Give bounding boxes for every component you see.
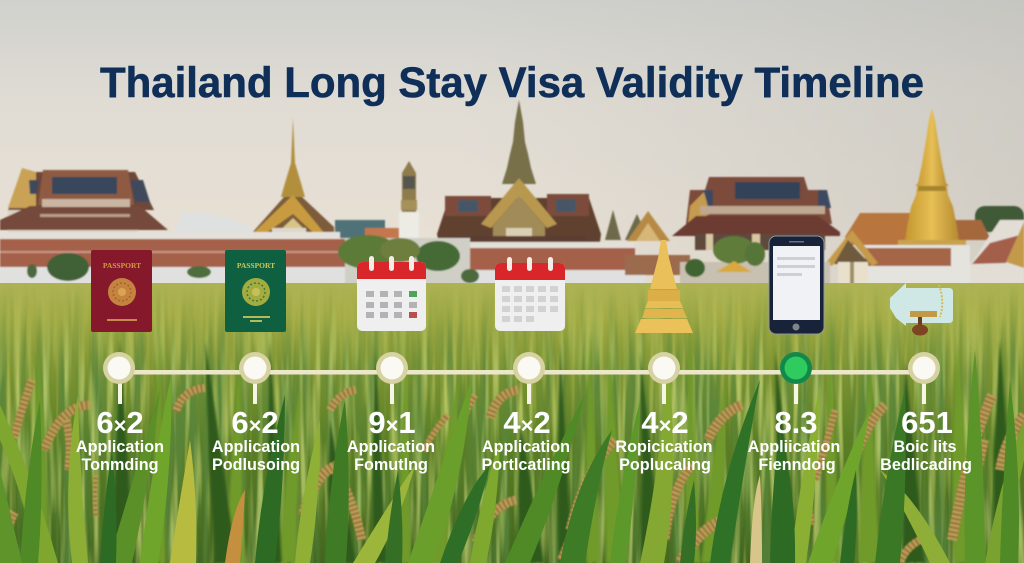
timeline connector line xyxy=(119,370,924,374)
icon: green passport xyxy=(225,250,286,332)
icon: green passport: PASSPORT xyxy=(237,261,275,270)
right side pavilions xyxy=(826,220,1024,285)
far trees and low buildings xyxy=(172,206,1024,240)
timeline step 6: active green node xyxy=(748,352,840,474)
icon: calendar xyxy=(495,257,565,331)
background: temple skyline xyxy=(0,100,1024,285)
small gold temple centre right xyxy=(627,211,670,241)
orange roofs behind stupa xyxy=(845,213,910,255)
background: rice field xyxy=(0,283,1024,563)
timeline step 4: Portlcatling xyxy=(481,456,571,474)
timeline step 6: active green node: 8.3 xyxy=(774,405,818,440)
timeline step 5: 4×2 xyxy=(641,405,689,440)
background: rice blurred blades xyxy=(30,320,1016,563)
timeline step 5: Poplucaling xyxy=(619,456,711,474)
icon: golden stupa xyxy=(635,240,693,333)
foreground rice blades xyxy=(0,350,1024,563)
golden stupa xyxy=(898,108,966,247)
timeline step 4: Application xyxy=(482,438,570,456)
background: sky xyxy=(0,0,1024,290)
timeline step 2: 6×2 xyxy=(231,405,279,440)
timeline step 2: Podlusoing xyxy=(212,456,300,474)
icon: red passport xyxy=(91,250,152,332)
timeline step 3: Application xyxy=(347,438,435,456)
timeline step 7: 651 xyxy=(901,405,953,440)
icon: red passport: PASSPORT xyxy=(103,261,141,270)
timeline step 5: Ropicication xyxy=(615,438,713,456)
timeline step 2: Application xyxy=(212,438,300,456)
icon: calendar with coloured days xyxy=(357,256,426,331)
title: Thailand Long Stay Visa Validity Timeline xyxy=(100,59,924,107)
rice panicles xyxy=(4,380,1024,563)
icon: smartphone xyxy=(769,236,824,334)
icon: pale teal arrow and brown base xyxy=(890,283,953,336)
timeline step 4: 4×2 xyxy=(503,405,551,440)
small gold temple xyxy=(250,118,334,242)
white bell tower xyxy=(399,161,419,242)
timeline step 5 xyxy=(615,352,713,474)
timeline step 4 xyxy=(481,352,571,474)
timeline step 6: active green node: Fienndoig xyxy=(758,456,836,474)
timeline step 1: Tonmding xyxy=(81,456,159,474)
timeline step 7: Boic lits xyxy=(894,438,956,456)
timeline step 6: active green node: Appliication xyxy=(748,438,840,456)
palace wall xyxy=(0,232,830,285)
timeline step 3 xyxy=(347,352,435,474)
timeline step 1: 6×2 xyxy=(96,405,144,440)
timeline step 2 xyxy=(212,352,300,474)
garden trees xyxy=(27,235,765,283)
timeline step 3: 9×1 xyxy=(368,405,416,440)
right temple xyxy=(672,177,840,250)
timeline step 7 xyxy=(880,352,972,474)
left temple xyxy=(0,168,168,235)
timeline step 3: Fomutlng xyxy=(354,456,428,474)
central grand temple xyxy=(437,100,601,250)
timeline step 1: Application xyxy=(76,438,164,456)
timeline step 7: Bedlicading xyxy=(880,456,972,474)
timeline step 1 xyxy=(76,352,164,474)
